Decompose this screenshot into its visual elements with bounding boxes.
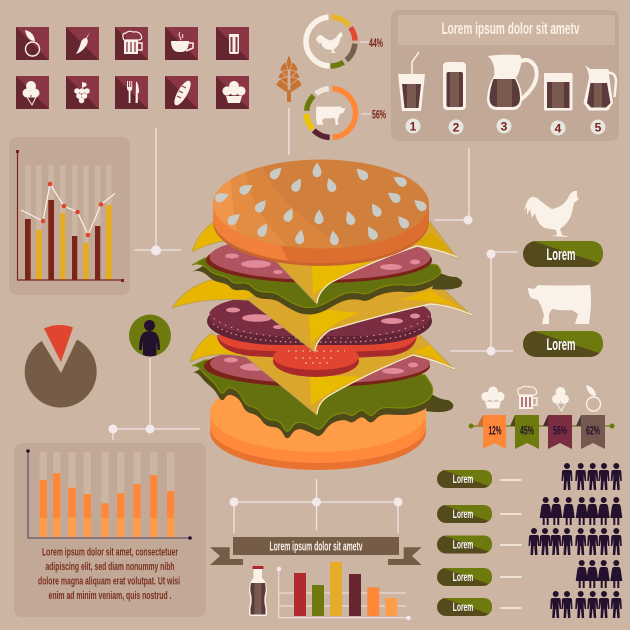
people row 2 bbox=[540, 497, 622, 525]
small label pills bbox=[437, 470, 492, 616]
drink numbers: 3 bbox=[501, 120, 508, 134]
top bun bbox=[213, 160, 429, 266]
label pill: cow bbox=[523, 331, 603, 357]
ribbon 56% bbox=[543, 415, 572, 449]
icon: baguette bbox=[165, 76, 198, 109]
connector lines bbox=[108, 108, 518, 533]
ribbon 62%: 62% bbox=[586, 426, 600, 438]
pill 3 bbox=[437, 536, 492, 554]
icon: grapes bbox=[66, 76, 99, 109]
lower lettuce bbox=[192, 360, 453, 438]
ribbon 45% bbox=[510, 415, 539, 449]
people row 5 bbox=[550, 591, 622, 618]
donut: chicken share: 44% bbox=[369, 38, 383, 50]
drink 5: small jug bbox=[584, 65, 616, 110]
drink numbers: 4 bbox=[555, 122, 562, 136]
ribbon 12%: 12% bbox=[488, 426, 502, 438]
paragraph text: dolore magna aliquam erat volutpat. Ut wisi bbox=[38, 576, 180, 588]
panel: drinks bbox=[391, 10, 619, 141]
drink numbers: 2 bbox=[453, 120, 460, 134]
pill connector dashes bbox=[500, 480, 522, 608]
label pill: cow: Lorem bbox=[546, 336, 576, 354]
pie chart bbox=[25, 325, 97, 408]
center banner: Lorem ipsum dolor sit ametv bbox=[270, 540, 363, 554]
icon: chili bbox=[66, 27, 99, 60]
pill 1: Lorem bbox=[453, 472, 473, 486]
bottom bun bbox=[210, 374, 426, 470]
icon: wheat bbox=[276, 55, 302, 102]
icon: coffee cup bbox=[165, 27, 198, 60]
icon: apple bbox=[16, 27, 49, 60]
top salami bbox=[206, 234, 432, 283]
drink numbers bbox=[406, 118, 606, 136]
cow silhouette bbox=[528, 285, 591, 324]
drink 2: tall glass bbox=[443, 62, 466, 110]
burger illustration bbox=[172, 150, 472, 470]
upper lettuce bbox=[192, 245, 462, 315]
pill 4 bbox=[437, 568, 492, 586]
lower salami bbox=[204, 344, 430, 387]
people row 4 bbox=[576, 560, 622, 588]
label pill: chicken: Lorem bbox=[546, 246, 576, 264]
sesame seeds bbox=[214, 162, 428, 246]
ribbon 56%: 56% bbox=[553, 426, 567, 438]
paragraph text: adipiscing elit, sed diam nonummy nibh bbox=[46, 561, 175, 573]
ribbon 62% bbox=[576, 415, 605, 449]
paragraph text bbox=[38, 546, 180, 602]
chicken silhouette bbox=[524, 191, 579, 237]
panel: bar and line chart bbox=[9, 137, 130, 295]
top cheese bbox=[192, 222, 457, 304]
paragraph text: enim ad minim veniam, quis nostrud . bbox=[48, 590, 172, 602]
drink 4: short glass bbox=[544, 73, 572, 110]
pill 5 bbox=[437, 598, 492, 616]
icon: tall glass bbox=[216, 27, 249, 60]
center banner bbox=[210, 537, 422, 565]
pill 2 bbox=[437, 505, 492, 523]
ribbon icons bbox=[481, 385, 600, 411]
panel: stacked bar chart with text bbox=[14, 443, 206, 617]
drink 1: cup with straw bbox=[398, 52, 425, 111]
ribbon 12% bbox=[477, 415, 506, 449]
pill 3: Lorem bbox=[453, 538, 473, 552]
icon: soda bottle bbox=[249, 566, 267, 616]
people pictograms bbox=[528, 463, 622, 618]
icon: muffin bbox=[216, 76, 249, 109]
icon: beer bbox=[115, 27, 148, 60]
paragraph text: Lorem ipsum dolor sit amet, consectetuer bbox=[42, 546, 178, 558]
donut: chicken share bbox=[296, 7, 383, 76]
ribbon percent row bbox=[468, 385, 614, 449]
bar chart: bottom center bbox=[277, 562, 411, 620]
donut: cow share: 56% bbox=[372, 110, 386, 122]
icon: fork and knife bbox=[115, 76, 148, 109]
icon: person in circle bbox=[129, 314, 171, 358]
tomatoes bbox=[217, 335, 417, 377]
dark salami bbox=[207, 295, 432, 345]
ribbon 45%: 45% bbox=[520, 426, 534, 438]
icon: ice cream bbox=[16, 76, 49, 109]
drink numbers: 5 bbox=[595, 120, 602, 134]
people row 3 bbox=[528, 528, 622, 555]
pill 2: Lorem bbox=[453, 507, 473, 521]
icon grid: food categories bbox=[16, 27, 249, 109]
donut: cow share bbox=[296, 78, 386, 148]
people row 1 bbox=[562, 463, 622, 490]
drink 3: jug bbox=[487, 55, 537, 110]
drink numbers: 1 bbox=[410, 120, 417, 134]
lower cheese bbox=[190, 333, 455, 415]
label pill: chicken bbox=[523, 241, 603, 267]
middle cheese bbox=[172, 280, 472, 352]
pill 5: Lorem bbox=[453, 600, 473, 614]
pill 1 bbox=[437, 470, 492, 488]
pill 4: Lorem bbox=[453, 570, 473, 584]
